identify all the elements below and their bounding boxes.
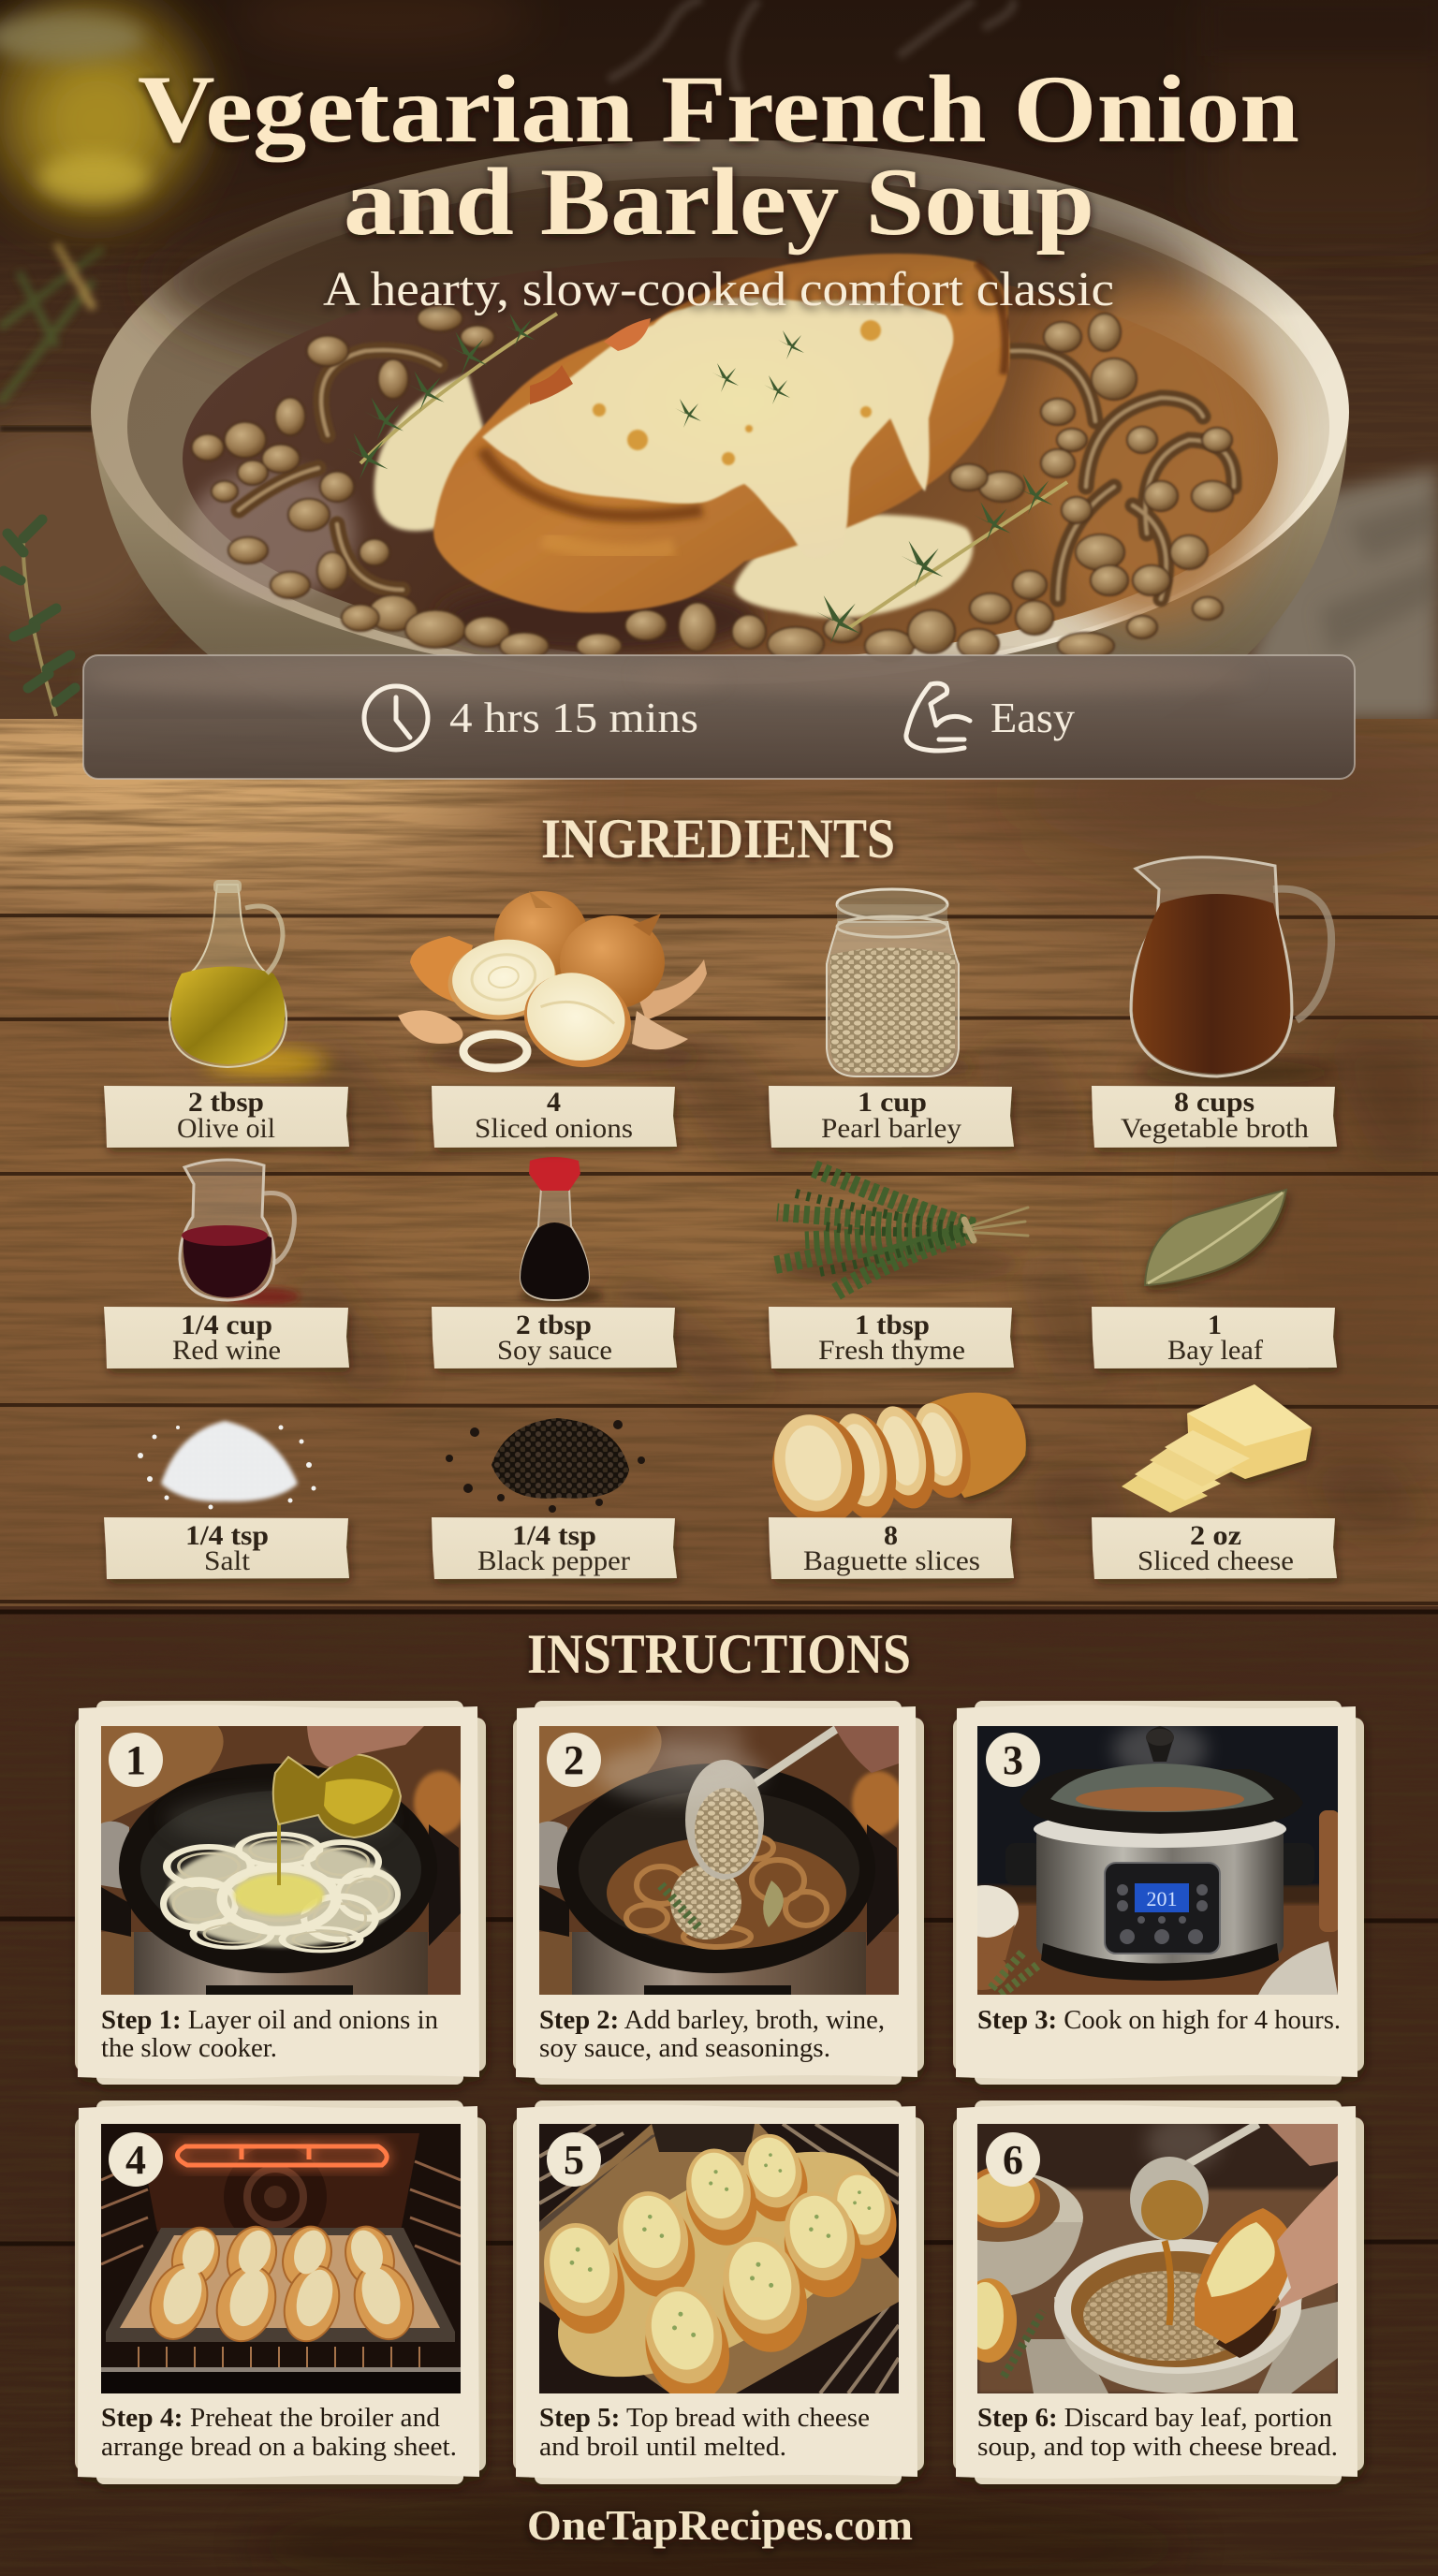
step 4 caption: arrange bread on a baking sheet. xyxy=(101,2433,457,2462)
subtitle: A hearty, slow-cooked comfort classic xyxy=(323,263,1114,316)
label: salt: 1/4 tsp xyxy=(185,1520,269,1551)
badge 4: 4 xyxy=(125,2137,146,2183)
ingredient: onions xyxy=(398,891,707,1082)
step 4 caption: Step 4: Preheat the broiler and xyxy=(101,2404,440,2433)
label: sliced cheese xyxy=(1092,1517,1337,1579)
label: black pepper: Black pepper xyxy=(477,1545,630,1576)
step 3 card xyxy=(951,1701,1364,2085)
badge 6 xyxy=(986,2132,1040,2187)
melted cheese pools xyxy=(374,374,973,618)
label: salt xyxy=(104,1517,349,1579)
step 1 photo: oil over onions in slow cooker xyxy=(101,1726,461,1995)
badge 2: 2 xyxy=(564,1737,584,1783)
onion ring xyxy=(463,1034,527,1068)
label: soy sauce: Soy sauce xyxy=(497,1335,612,1366)
label: bay leaf xyxy=(1092,1307,1337,1368)
title: Vegetarian French Onion xyxy=(138,56,1299,163)
hero backdrop xyxy=(0,0,1438,719)
label: sliced onions xyxy=(432,1086,677,1148)
label: pearl barley xyxy=(769,1086,1014,1148)
label: sliced onions: 4 xyxy=(547,1087,561,1118)
label: baguette slices xyxy=(769,1517,1014,1579)
thyme sprigs on soup xyxy=(346,314,1067,645)
step 1 card xyxy=(75,1701,486,2085)
label: baguette slices: Baguette slices xyxy=(803,1545,980,1576)
step 2 card xyxy=(513,1701,924,2085)
label: soy sauce xyxy=(432,1307,677,1368)
label: salt: Salt xyxy=(204,1545,251,1576)
step 2 photo: barley added to soup xyxy=(539,1726,899,1995)
step 4 photo: bread on sheet under broiler xyxy=(101,2124,461,2393)
ingredient: soy sauce xyxy=(520,1157,604,1304)
icon: clock xyxy=(364,686,428,750)
step 6 caption: Step 6: Discard bay leaf, portion xyxy=(977,2404,1332,2433)
label: black pepper xyxy=(432,1517,677,1579)
badge 5 xyxy=(547,2132,601,2187)
ingredient: pearl barley jar xyxy=(827,889,978,1078)
step 3 photo: slow cooker cooking xyxy=(977,1726,1338,1995)
badge 3 xyxy=(986,1733,1040,1787)
cook time: 4 hrs 15 mins xyxy=(449,695,698,741)
step 3 caption: Step 3: Cook on high for 4 hours. xyxy=(977,2006,1341,2035)
dim upper hero for title xyxy=(0,0,1438,318)
label: vegetable broth xyxy=(1092,1086,1337,1148)
step 5 card xyxy=(513,2100,924,2484)
wood background: ingredients section xyxy=(0,665,1438,1610)
soup xyxy=(183,257,1278,662)
hero photo: bowl of soup xyxy=(0,0,1438,719)
step 2 caption xyxy=(539,2006,885,2063)
steam xyxy=(609,0,1013,94)
step 2 caption: soy sauce, and seasonings. xyxy=(539,2034,830,2063)
step 5 photo: melted cheese toast xyxy=(539,2124,899,2393)
step 1 caption: the slow cooker. xyxy=(101,2034,277,2063)
label: bay leaf: 1 xyxy=(1208,1310,1222,1340)
step 4 caption xyxy=(101,2404,457,2462)
ingredient: olive oil xyxy=(169,880,328,1076)
label: soy sauce: 2 tbsp xyxy=(516,1310,592,1340)
wood background: instructions section xyxy=(0,1606,1438,2576)
ingredient: red wine xyxy=(180,1160,300,1305)
olive oil glass, blurred xyxy=(0,0,206,225)
ingredient: vegetable broth pitcher xyxy=(1131,857,1339,1085)
footer website: OneTapRecipes.com xyxy=(527,2501,913,2549)
ingredient: sliced cheese xyxy=(1122,1384,1312,1513)
label: sliced onions: Sliced onions xyxy=(475,1113,633,1144)
badge 6: 6 xyxy=(1003,2137,1023,2183)
step 6 card xyxy=(918,2100,1364,2484)
ingredient: salt xyxy=(138,1421,316,1509)
ingredient: bay leaf xyxy=(1145,1190,1286,1285)
step 6 caption: soup, and top with cheese bread. xyxy=(977,2433,1338,2462)
label: fresh thyme: 1 tbsp xyxy=(855,1310,930,1340)
label: red wine: 1/4 cup xyxy=(181,1310,272,1340)
thyme sprig bottom-left xyxy=(4,520,75,716)
badge 5: 5 xyxy=(564,2137,584,2183)
step 1 caption xyxy=(101,2006,438,2063)
step 6 caption xyxy=(977,2404,1338,2462)
label: baguette slices: 8 xyxy=(884,1520,898,1551)
label: fresh thyme xyxy=(769,1307,1014,1368)
step 5 caption: Step 5: Top bread with cheese xyxy=(539,2404,870,2433)
label: black pepper: 1/4 tsp xyxy=(512,1520,596,1551)
label: sliced cheese: 2 oz xyxy=(1190,1520,1241,1551)
ingredient: black pepper xyxy=(446,1418,645,1513)
onion strands xyxy=(239,350,1234,599)
ingredient: thyme bundle xyxy=(772,1168,1028,1294)
step 4 card xyxy=(75,2100,486,2484)
label: red wine xyxy=(104,1307,349,1368)
step 2 caption: Step 2: Add barley, broth, wine, xyxy=(539,2006,885,2035)
label: pearl barley: Pearl barley xyxy=(821,1113,961,1144)
ingredient labels xyxy=(104,1086,1337,1579)
step 1 caption: Step 1: Layer oil and onions in xyxy=(101,2006,438,2035)
toast with melted cheese xyxy=(433,254,1009,612)
icon: flexed arm xyxy=(906,683,970,751)
step 5 caption xyxy=(539,2404,870,2462)
out of focus thyme xyxy=(0,243,103,402)
badge 4 xyxy=(109,2132,163,2187)
label: fresh thyme: Fresh thyme xyxy=(818,1335,965,1366)
step 6 photo: serving soup xyxy=(918,2115,1338,2393)
step 3 photo: slow cooker cooking: 201 xyxy=(1146,1887,1178,1910)
badge 2 xyxy=(547,1733,601,1787)
barley grains xyxy=(192,305,1233,662)
label: pearl barley: 1 cup xyxy=(858,1087,927,1118)
label: olive oil xyxy=(104,1086,349,1148)
difficulty: Easy xyxy=(990,695,1076,741)
title xyxy=(138,56,1299,256)
instructions heading: INSTRUCTIONS xyxy=(527,1623,911,1685)
title: and Barley Soup xyxy=(344,149,1094,256)
bowl xyxy=(91,139,1349,655)
badge 3: 3 xyxy=(1003,1737,1023,1783)
label: olive oil: 2 tbsp xyxy=(188,1087,264,1118)
ingredient: baguette slices xyxy=(762,1393,1026,1534)
label: vegetable broth: Vegetable broth xyxy=(1121,1113,1309,1144)
label: olive oil: Olive oil xyxy=(177,1113,275,1144)
label: sliced cheese: Sliced cheese xyxy=(1137,1545,1294,1576)
label: vegetable broth: 8 cups xyxy=(1174,1087,1255,1118)
step 5 caption: and broil until melted. xyxy=(539,2433,786,2462)
badge 1 xyxy=(109,1733,163,1787)
time and difficulty bar xyxy=(83,655,1355,779)
label: red wine: Red wine xyxy=(172,1335,281,1366)
ingredients heading: INGREDIENTS xyxy=(541,808,895,870)
label: bay leaf: Bay leaf xyxy=(1167,1335,1263,1366)
badge 1: 1 xyxy=(125,1737,146,1783)
